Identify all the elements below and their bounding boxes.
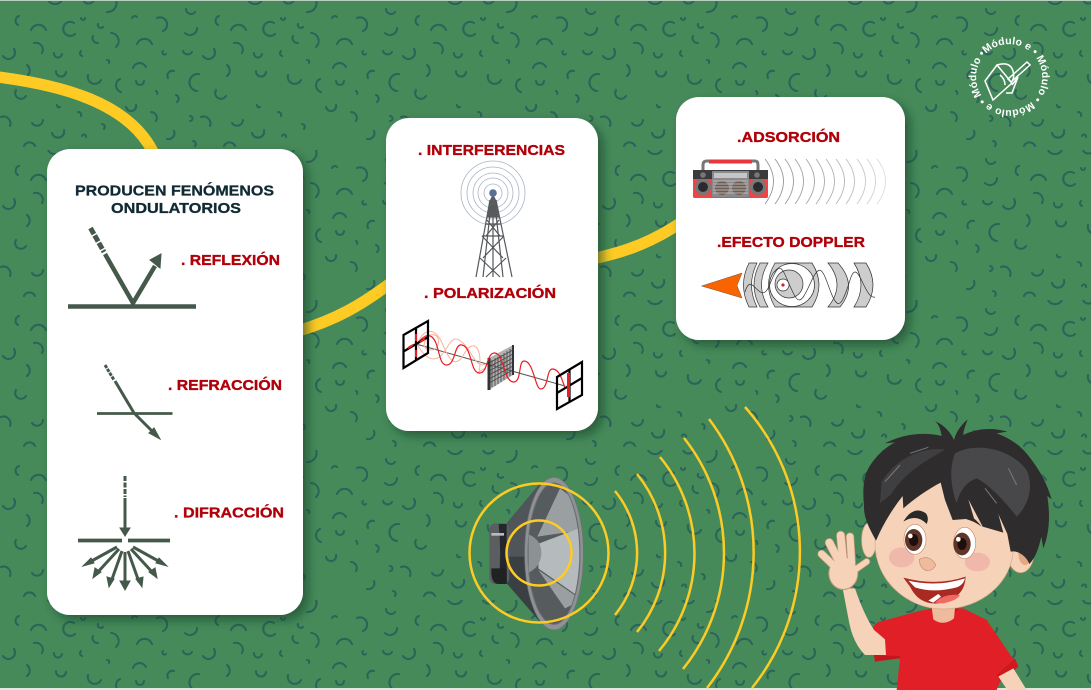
icon: difracción [78,476,170,590]
heading: producen fenómenos ondulatorios: PRODUCEN FENÓMENOS [75,182,274,200]
icon: refracción [97,365,172,439]
icon: reflexión [68,228,196,306]
label: reflexión: . REFLEXIÓN [181,251,280,269]
icon: boombox radio [693,160,768,198]
icon: speaker [489,477,583,630]
hand [822,535,867,590]
mouth [903,577,966,604]
neck [931,605,955,623]
icon: polarization diagram [404,321,582,409]
logo: módulo e: Módulo e • Módulo • Módulo e • Módulo • [968,36,1050,118]
yellow connecting line [0,77,682,331]
eyebrows [903,511,982,527]
label: interferencias: . INTERFERENCIAS [418,142,565,159]
icon: orange arrow [702,273,742,298]
face [875,480,1013,609]
icon: doppler waves [744,263,875,307]
heading: producen fenómenos ondulatorios [75,182,274,217]
label: polarización: . POLARIZACIÓN [424,284,556,302]
icon: radio tower [461,161,525,277]
panel: adsorción y efecto doppler [676,97,905,340]
arm [843,588,886,655]
panel: interferencias y polarización [386,118,598,431]
label: efecto doppler: .EFECTO DOPPLER [717,234,865,251]
icon: sound waves [765,159,886,204]
ears [862,523,1034,573]
heading: producen fenómenos ondulatorios: ONDULATORIOS [111,201,241,217]
icon: logo book and pencil [985,62,1030,100]
eyes [904,524,976,559]
nose [919,558,936,571]
speaker rings and sound waves [470,407,800,688]
panel: fenómenos ondulatorios [47,149,303,615]
illustration: waving boy [822,419,1052,690]
label: refracción: . REFRACCIÓN [168,376,282,394]
label: difracción: . DIFRACCIÓN [174,504,284,522]
red t-shirt [873,608,1027,690]
label: adsorción: .ADSORCIÓN [737,128,840,146]
cheeks [889,547,990,571]
black hair [863,419,1052,564]
